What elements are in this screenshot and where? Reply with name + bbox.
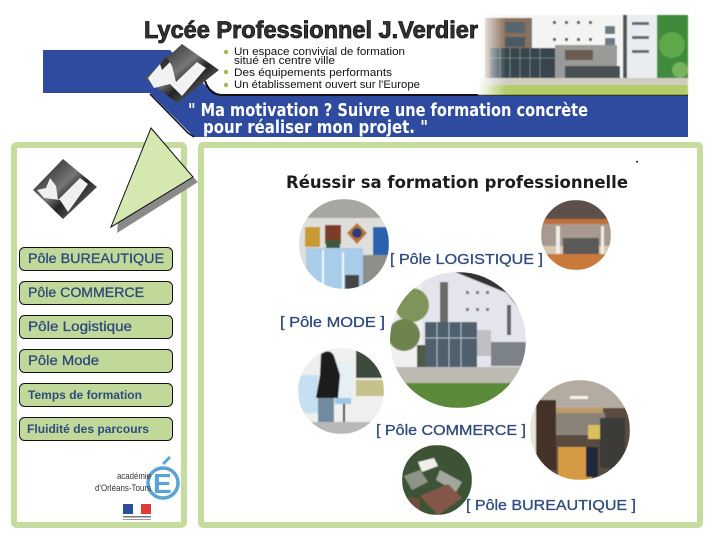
label: Pôle COMMERCE: [ Pôle COMMERCE ] bbox=[376, 422, 526, 439]
banner: blue band bbox=[43, 50, 688, 137]
photo: central school building bbox=[388, 272, 526, 408]
banner bullet list: Un espace convivial de formation bbox=[234, 46, 405, 58]
logo: académie d'Orléans-Tours bbox=[95, 456, 178, 520]
button: Fluidité des parcours bbox=[20, 418, 172, 440]
button: Temps de formation: Temps de formation bbox=[28, 388, 142, 402]
banner quote: pour réaliser mon projet. " bbox=[203, 117, 428, 138]
button: Fluidité des parcours: Fluidité des parcours bbox=[27, 422, 149, 436]
photo: reception room bbox=[299, 199, 389, 289]
banner logo: diamond JV bbox=[145, 44, 219, 103]
small dot bbox=[636, 161, 638, 162]
photo: logistics hall bbox=[541, 200, 611, 270]
button: Pôle Mode bbox=[20, 350, 172, 372]
photo: fashion workshop bbox=[298, 348, 384, 434]
label: Pôle BUREAUTIQUE: [ Pôle BUREAUTIQUE ] bbox=[466, 497, 636, 514]
label: Pôle MODE: [ Pôle MODE ] bbox=[280, 314, 385, 331]
banner photo: school building bbox=[478, 15, 688, 95]
callout triangle bbox=[111, 128, 198, 233]
banner bullet list: Un établissement ouvert sur l'Europe bbox=[234, 79, 420, 91]
panel: main content bbox=[201, 145, 700, 525]
photo: commerce reception bbox=[530, 380, 630, 480]
button: Pôle Mode: Pôle Mode bbox=[28, 353, 99, 368]
banner bullet list: situé en centre ville bbox=[234, 55, 335, 67]
logo: académie d'Orléans-Tours: E bbox=[153, 468, 172, 499]
banner title: Lycée Professionnel J.Verdier bbox=[144, 17, 478, 44]
banner quote bbox=[188, 100, 588, 138]
label: Pôle LOGISTIQUE: [ Pôle LOGISTIQUE ] bbox=[390, 251, 543, 268]
panel: left navigation bbox=[14, 145, 184, 525]
button: Pôle Logistique bbox=[20, 316, 172, 338]
photo: aerial view bbox=[402, 445, 472, 515]
banner bullet list: Des équipements performants bbox=[234, 67, 393, 79]
button: Pôle BUREAUTIQUE bbox=[20, 248, 172, 270]
button: Pôle Logistique: Pôle Logistique bbox=[28, 319, 132, 334]
heading: Réussir sa formation professionnelle bbox=[286, 173, 628, 193]
icon: small diamond logo bbox=[33, 159, 97, 219]
banner quote: " Ma motivation ? Suivre une formation concrète bbox=[188, 100, 588, 121]
button: Temps de formation bbox=[20, 384, 172, 406]
button: Pôle COMMERCE: Pôle COMMERCE bbox=[28, 285, 144, 300]
button: Pôle BUREAUTIQUE: Pôle BUREAUTIQUE bbox=[28, 251, 164, 266]
banner bullet list bbox=[224, 46, 420, 91]
logo: académie d'Orléans-Tours: académie bbox=[117, 471, 151, 481]
button: Pôle COMMERCE bbox=[20, 282, 172, 304]
logo: académie d'Orléans-Tours: d'Orléans-Tours bbox=[95, 483, 151, 493]
